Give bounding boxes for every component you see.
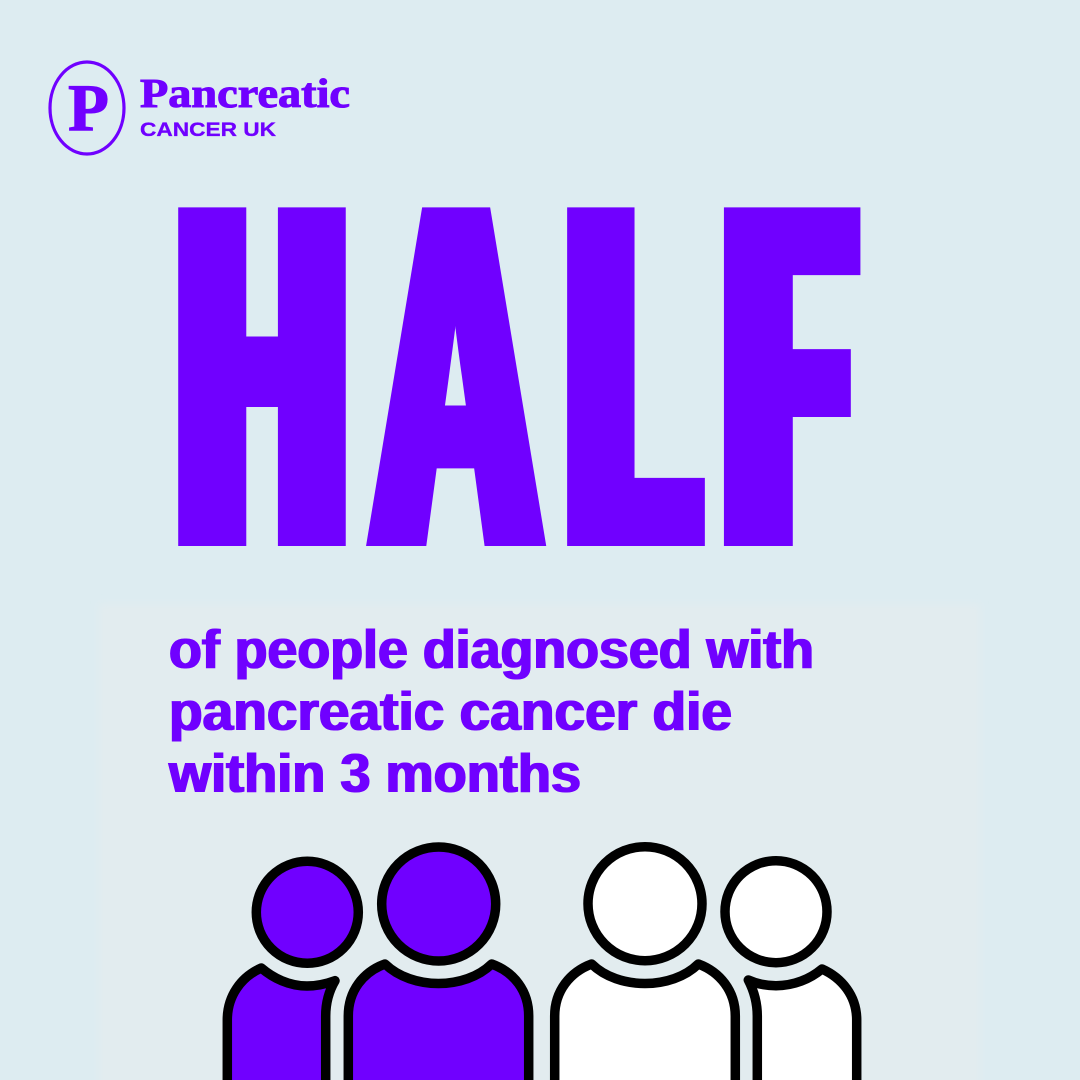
logo wordmark: Pancreatic bbox=[140, 70, 350, 116]
title: HALF bbox=[171, 18, 856, 678]
logo emblem bbox=[50, 62, 124, 154]
person 3: white bbox=[555, 847, 735, 1080]
person 1: purple bbox=[227, 861, 358, 1080]
letter A: A bbox=[372, 18, 539, 677]
logo subline: CANCER UK bbox=[140, 119, 276, 141]
person 4: white bbox=[725, 861, 857, 1080]
panel: text and people backdrop bbox=[99, 604, 980, 1080]
letter F: F bbox=[718, 19, 856, 677]
logo: Pancreatic Cancer UK bbox=[50, 62, 350, 154]
person 2: purple bbox=[348, 847, 529, 1080]
logo emblem: P bbox=[68, 71, 109, 145]
line 2: pancreatic cancer die bbox=[169, 680, 732, 742]
letter H: H bbox=[171, 20, 353, 678]
line 3: within 3 months bbox=[168, 742, 581, 804]
letter L: L bbox=[558, 19, 703, 677]
people illustration bbox=[227, 847, 857, 1080]
body text bbox=[168, 618, 814, 804]
line 1: of people diagnosed with bbox=[169, 618, 814, 680]
